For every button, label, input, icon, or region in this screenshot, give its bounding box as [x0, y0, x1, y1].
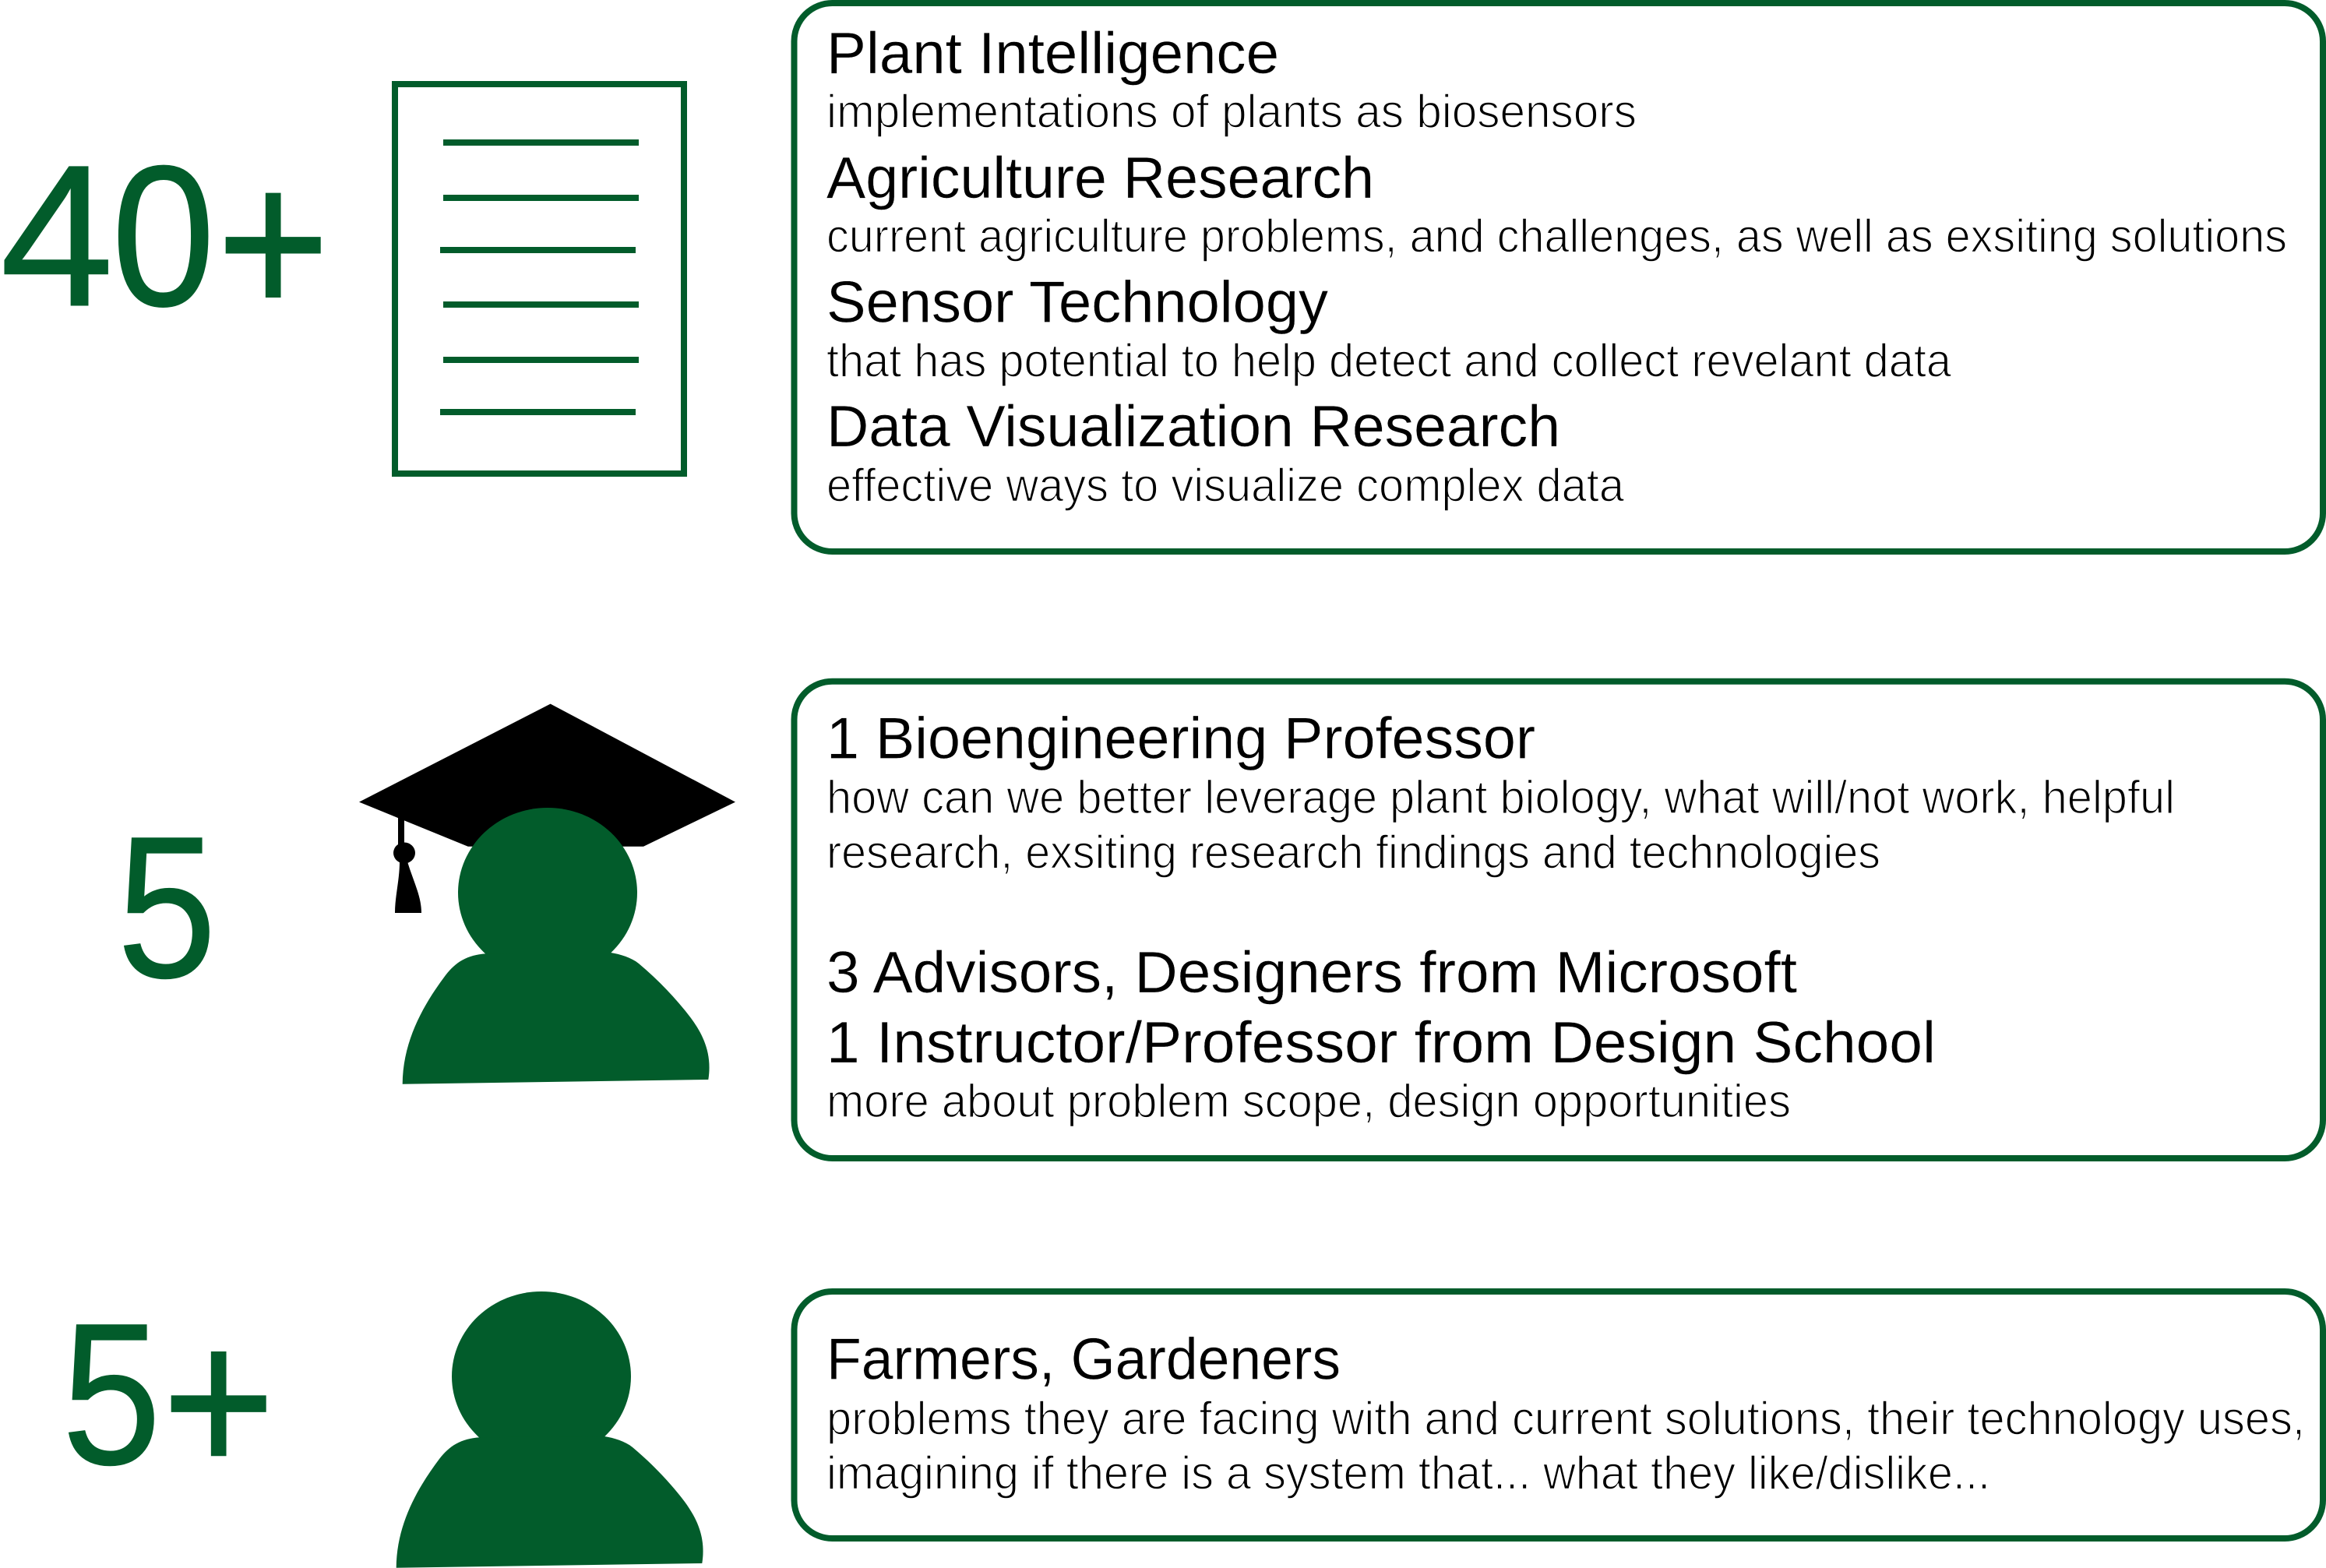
- text: sensor potential: that has potential to help detect and collect revelant data: [826, 335, 1952, 386]
- heading: Agriculture Research: Agriculture Research: [826, 145, 1374, 210]
- icon: person with graduation cap: [359, 704, 735, 1084]
- stat: 5+ farmers: [62, 1281, 275, 1518]
- text: farmer problems: problems they are facing with and current solutions, their technology uses,: [826, 1393, 2305, 1444]
- text: professor topics: how can we better leverage plant biology, what will/not work, helpful: [826, 771, 2175, 823]
- heading: Farmers, Gardeners: Farmers, Gardeners: [826, 1326, 1341, 1391]
- text: farmer imagining: imagining if there is a system that... what they like/dislike...: [826, 1447, 1990, 1499]
- icon: person silhouette: [403, 808, 710, 1084]
- stat: 40+ papers: [0, 124, 330, 360]
- icon: person silhouette: [396, 1291, 703, 1568]
- heading: Advisors: 3 Advisors, Designers from Microsoft: [826, 939, 1797, 1005]
- icon: graduation cap: [359, 704, 735, 913]
- text: visualization methods: effective ways to visualize complex data: [826, 460, 1625, 511]
- panel: farmers and gardeners: [795, 1291, 2323, 1538]
- stat: 5 experts: 5: [117, 794, 217, 1020]
- text: professor topics continued: research, exsiting research findings and technologies: [826, 826, 1880, 879]
- stat: 5+ farmers: +: [163, 1284, 275, 1518]
- text: agriculture problems: current agriculture problems, and challenges, as well as exsiting solutions: [826, 210, 2287, 262]
- stat: 40+ papers: 0: [111, 124, 215, 348]
- heading: Instructor: 1 Instructor/Professor from Design School: [826, 1010, 1936, 1075]
- heading: Plant Intelligence: Plant Intelligence: [826, 20, 1279, 86]
- heading: Data Visualization Research: Data Visualization Research: [826, 393, 1560, 459]
- stat: 5+ farmers: 5: [62, 1281, 161, 1506]
- heading: Sensor Technology: Sensor Technology: [826, 270, 1328, 335]
- panel: literature topics: [795, 3, 2323, 551]
- panel: expert interviews: [795, 682, 2323, 1158]
- text: plants as biosensors: implementations of plants as biosensors: [826, 86, 1637, 137]
- stat: 40+ papers: +: [217, 125, 330, 360]
- icon: document: [395, 84, 684, 474]
- heading: Bioengineering Professor: 1 Bioengineering Professor: [826, 706, 1535, 771]
- stat: 40+ papers: 4: [0, 124, 114, 349]
- text: advisor topics: more about problem scope, design opportunities: [826, 1075, 1791, 1127]
